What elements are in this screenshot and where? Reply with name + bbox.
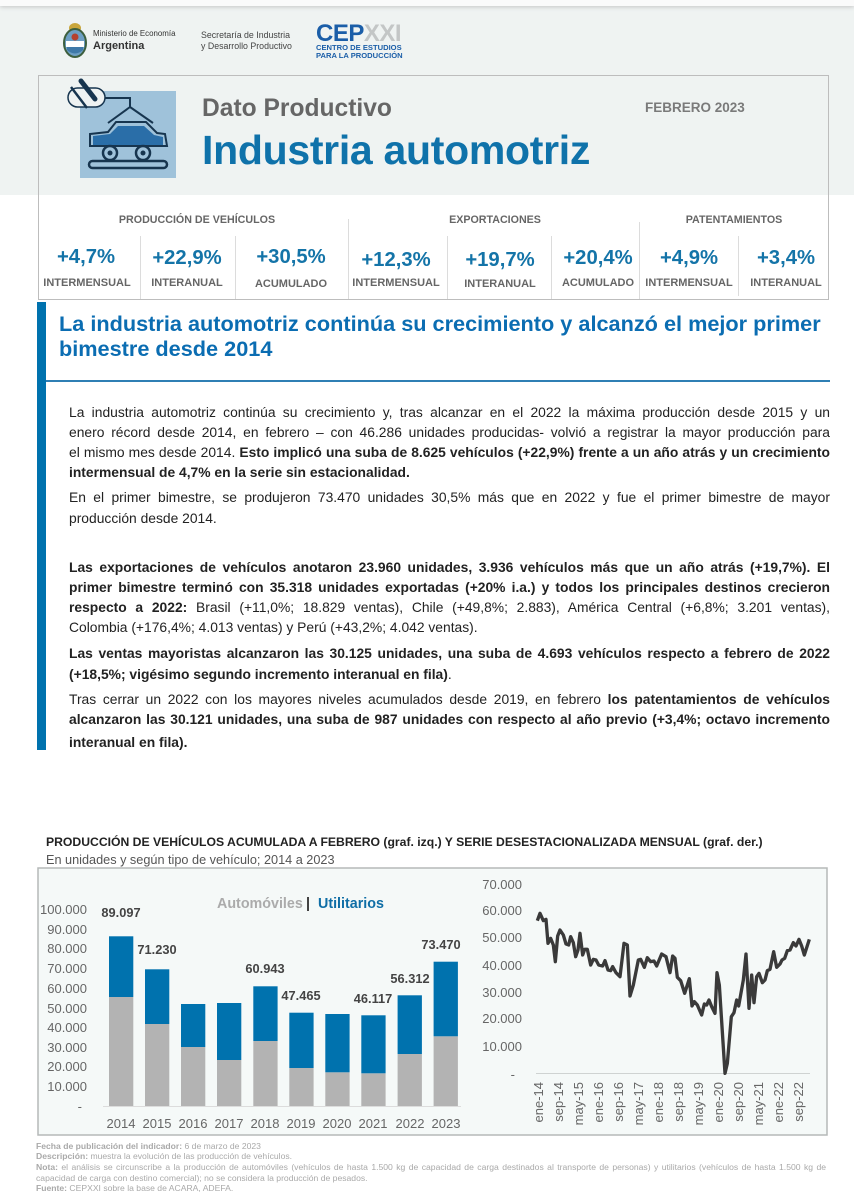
bar chart: producción acumulada: 20.000 (47, 1059, 87, 1074)
bar chart: producción acumulada: 2017 (215, 1116, 243, 1131)
bar chart: producción acumulada: 47.465 (281, 988, 321, 1003)
main heading (59, 311, 821, 361)
KPI group heading: producción: PRODUCCIÓN DE VEHÍCULOS (119, 214, 275, 226)
footnotes: Fecha de publicación del indicador: 6 de marzo de 2023 (36, 1141, 261, 1151)
legend: Automóviles (217, 896, 303, 912)
line chart: serie desestacionalizada (482, 877, 810, 1125)
KPI: producción intermensual: +4,7% (57, 246, 115, 268)
bar chart: producción acumulada: 2016 (179, 1116, 207, 1131)
KPI: producción acumulado: ACUMULADO (255, 278, 327, 290)
bar chart: producción acumulada: 60.000 (47, 981, 87, 996)
panel: charts (37, 867, 828, 1136)
paragraph: patentamientos: alcanzaron las 30.121 unidades, una suba de 987 unidades con respecto al año previo (+3,4%; octavo incremento (69, 711, 830, 727)
paragraph: ventas mayoristas (69, 645, 830, 682)
KPI: exportaciones acumulado (562, 247, 634, 289)
paragraph: producción: La industria automotriz continúa su crecimiento y, tras alcanzar en el 2022 la máxima producción desde 2015 y un (69, 404, 830, 420)
chart subtitle: En unidades y según tipo de vehículo; 2014 a 2023 (46, 853, 335, 867)
date: FEBRERO 2023 (645, 100, 745, 115)
KPI: exportaciones interanual: INTERANUAL (464, 278, 536, 290)
line chart: serie desestacionalizada: sep-16 (611, 1082, 626, 1122)
main heading: bimestre desde 2014 (59, 336, 272, 361)
icon: car assembly line (67, 78, 176, 178)
footnotes (36, 1141, 826, 1193)
paragraph: exportaciones: Colombia (+176,4%; 4.013 ventas) y Perú (+43,2%; 4.042 ventas). (69, 619, 478, 635)
KPI: patentamientos interanual (750, 247, 822, 289)
KPI group heading: patentamientos: PATENTAMIENTOS (686, 214, 782, 226)
logo: CEPXXI (316, 20, 403, 60)
title: Industria automotriz: Industria automotriz (202, 127, 590, 173)
KPI: producción intermensual (43, 246, 131, 289)
KPI frame (38, 75, 829, 300)
KPI: exportaciones interanual: +19,7% (465, 249, 535, 271)
KPI separators (140, 219, 739, 299)
KPI: exportaciones acumulado: +20,4% (563, 247, 633, 269)
KPI: producción interanual: INTERANUAL (151, 277, 223, 289)
KPI: exportaciones intermensual: +12,3% (361, 249, 431, 271)
bar chart: producción acumulada: 2014 (107, 1116, 135, 1131)
bar chart: producción acumulada: - (78, 1099, 82, 1114)
bar chart: producción acumulada: 2022 (396, 1116, 424, 1131)
footnotes: Nota: el análisis se circunscribe a la producción de automóviles (vehículos de hasta 1.500 kg de capacidad de carga destinados al transporte de personas) y utilitarios (vehículos de hasta 1.500 kg de (36, 1162, 826, 1172)
bar chart: producción acumulada: 2020 (323, 1116, 351, 1131)
KPI: patentamientos interanual: INTERANUAL (750, 277, 822, 289)
heading rule (46, 380, 830, 382)
bar chart: producción acumulada: 2023 (432, 1116, 460, 1131)
paragraph: exportaciones: Las exportaciones de vehículos anotaron 23.960 unidades, 3.936 vehículos más que un año atrás (+19,7%). El (69, 559, 830, 575)
line chart: serie desestacionalizada: sep-14 (551, 1082, 566, 1122)
logo: CEPXXI: CEPXXI (316, 20, 401, 47)
line chart: serie desestacionalizada: may-21 (751, 1082, 766, 1125)
bar chart: producción acumulada: 71.230 (137, 942, 177, 957)
chart title: PRODUCCIÓN DE VEHÍCULOS ACUMULADA A FEBRERO (graf. izq.) Y SERIE DESESTACIONALIZADA MENSUAL (graf. der.) (46, 835, 763, 849)
footnotes: Fuente: CEPXXI sobre la base de ACARA, ADEFA. (36, 1183, 233, 1193)
bar chart: producción acumulada: 30.000 (47, 1040, 87, 1055)
bar chart: producción acumulada: 10.000 (47, 1079, 87, 1094)
line chart: serie desestacionalizada: may-19 (691, 1082, 706, 1125)
bar chart: producción acumulada: 40.000 (47, 1020, 87, 1035)
paragraph: bimestre (69, 489, 830, 526)
line chart: serie desestacionalizada: 50.000 (482, 930, 522, 945)
bar chart: producción acumulada: 56.312 (390, 971, 430, 986)
paragraph: exportaciones: primer bimestre terminó con 35.318 unidades exportadas (+20% i.a.) y todos los principales destinos crecieron (69, 579, 830, 595)
bar chart: producción acumulada: 80.000 (47, 941, 87, 956)
paragraph: bimestre: producción desde 2014. (69, 510, 217, 526)
accent bar (37, 302, 46, 750)
line chart: serie desestacionalizada: sep-18 (671, 1082, 686, 1122)
KPI: patentamientos intermensual: INTERMENSUAL (645, 277, 733, 289)
logo: Ministerio de Economía Argentina: Ministerio de Economía (93, 29, 175, 38)
line chart: serie desestacionalizada: ene-14 (531, 1082, 546, 1122)
logo: CEPXXI: CENTRO DE ESTUDIOS (316, 43, 402, 52)
logo: Ministerio de Economía Argentina (63, 23, 176, 58)
bar chart: producción acumulada: 60.943 (245, 961, 285, 976)
main heading: La industria automotriz continúa su crecimiento y alcanzó el mejor primer (59, 311, 821, 336)
bar chart: producción acumulada: 2019 (287, 1116, 315, 1131)
logo: Secretaría de Industria: Secretaría de Industria (201, 30, 290, 40)
line chart: serie desestacionalizada: may-15 (571, 1082, 586, 1125)
KPI: producción intermensual: INTERMENSUAL (43, 277, 131, 289)
line chart: serie desestacionalizada: 60.000 (482, 903, 522, 918)
legend: | (306, 896, 310, 912)
paragraph: ventas mayoristas: (+18,5%; vigésimo segundo incremento interanual en fila). (69, 666, 452, 682)
line chart: serie desestacionalizada: ene-22 (771, 1082, 786, 1122)
paragraph: producción: intermensual de 4,7% en la serie sin estacionalidad. (69, 464, 410, 480)
KPI: exportaciones interanual (464, 249, 536, 290)
KPI: exportaciones acumulado: ACUMULADO (562, 277, 634, 289)
bar chart: producción acumulada: 2021 (359, 1116, 387, 1131)
KPI: producción interanual (151, 247, 223, 289)
bar chart: producción acumulada: 73.470 (421, 937, 461, 952)
paragraph: producción: el mismo mes desde 2014. Esto implicó una suba de 8.625 vehículos (+22,9%) frente a un año atrás y un crecimiento (69, 444, 830, 460)
logo: Secretaría de Industria: y Desarrollo Productivo (201, 40, 292, 50)
paragraph: producción: enero récord desde 2014, en febrero – con 46.286 unidades producidas- volvió a registrar la mayor producción para (69, 424, 830, 440)
bar chart: producción acumulada: 46.117 (354, 991, 392, 1006)
bar chart: producción acumulada (40, 902, 461, 1131)
header band (0, 0, 854, 195)
line chart: serie desestacionalizada: sep-22 (791, 1082, 806, 1122)
line chart: serie desestacionalizada: ene-20 (711, 1082, 726, 1122)
bar chart: producción acumulada: 2015 (143, 1116, 171, 1131)
bar chart: producción acumulada: 2018 (251, 1116, 279, 1131)
paragraph: patentamientos: interanual en fila). (69, 734, 187, 750)
line chart: serie desestacionalizada: 20.000 (482, 1011, 522, 1026)
paragraph: exportaciones (69, 559, 830, 635)
logo: CEPXXI: PARA LA PRODUCCIÓN (316, 50, 403, 60)
line chart: serie desestacionalizada: 70.000 (482, 877, 522, 892)
logo: Secretaría de Industria (201, 30, 292, 51)
line chart: serie desestacionalizada: may-17 (631, 1082, 646, 1125)
line chart: serie desestacionalizada: 30.000 (482, 985, 522, 1000)
KPI: producción acumulado: +30,5% (256, 246, 326, 268)
bar chart: producción acumulada: 50.000 (47, 1001, 87, 1016)
paragraph: exportaciones: respecto a 2022: Brasil (+11,0%; 18.829 ventas), Chile (+49,8%; 2.883), América Central (+6,8%; 3.201 ventas), (69, 599, 830, 615)
line chart: serie desestacionalizada: - (511, 1067, 515, 1082)
paragraph: producción (69, 404, 830, 480)
KPI: producción acumulado (255, 246, 327, 290)
logo: Ministerio de Economía Argentina: Argentina (93, 40, 144, 52)
KPI: producción interanual: +22,9% (152, 247, 222, 269)
line chart: serie desestacionalizada: ene-16 (591, 1082, 606, 1122)
title: Dato Productivo: Dato Productivo (202, 95, 392, 122)
line chart: serie desestacionalizada: ene-18 (651, 1082, 666, 1122)
paragraph: patentamientos (69, 691, 830, 750)
footnotes: Descripción: muestra la evolución de las producción de vehículos. (36, 1151, 292, 1161)
legend: Utilitarios (318, 896, 384, 912)
KPI: patentamientos intermensual (645, 247, 733, 289)
line chart: serie desestacionalizada: 10.000 (482, 1039, 522, 1054)
paragraph: ventas mayoristas: Las ventas mayoristas alcanzaron las 30.125 unidades, una suba de 4.693 vehículos respecto a febrero de 2022 (69, 645, 830, 661)
bar chart: producción acumulada: 70.000 (47, 961, 87, 976)
line chart: serie desestacionalizada: sep-20 (731, 1082, 746, 1122)
KPI: patentamientos intermensual: +4,9% (660, 247, 718, 269)
KPI: exportaciones intermensual: INTERMENSUAL (352, 277, 440, 289)
footnotes: capacidad de carga con destino comercial); no se considera la producción de pesados. (36, 1173, 368, 1183)
KPI group heading: exportaciones: EXPORTACIONES (449, 214, 541, 226)
bar chart: producción acumulada: 100.000 (40, 902, 87, 917)
line chart: serie desestacionalizada: 40.000 (482, 958, 522, 973)
bar chart: producción acumulada: 89.097 (101, 905, 141, 920)
paragraph: patentamientos: Tras cerrar un 2022 con los mayores niveles acumulados desde 2019, en febrero los patentamientos de vehículos (69, 691, 830, 707)
legend (217, 896, 384, 912)
paragraph: bimestre: En el primer bimestre, se produjeron 73.470 unidades 30,5% más que en 2022 y fue el primer bimestre de mayor (69, 489, 830, 505)
KPI: patentamientos interanual: +3,4% (757, 247, 815, 269)
bar chart: producción acumulada: 90.000 (47, 922, 87, 937)
KPI: exportaciones intermensual (352, 249, 440, 289)
